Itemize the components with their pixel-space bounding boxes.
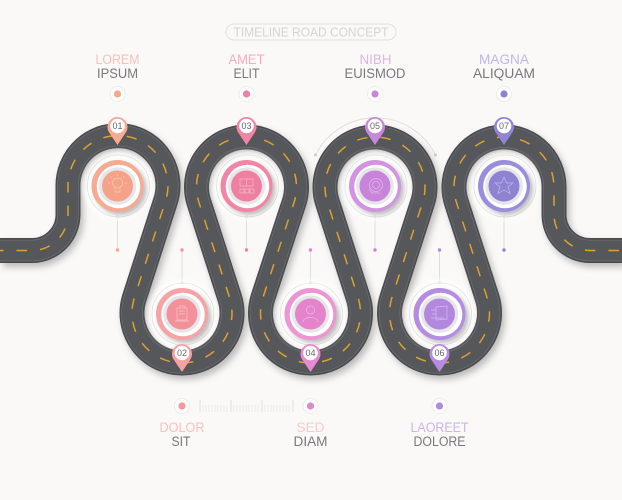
label 05	[344, 52, 406, 81]
dot 03	[239, 86, 254, 102]
dot 01	[110, 86, 125, 102]
badge 01	[82, 151, 152, 221]
label 07	[473, 52, 535, 81]
label 04	[294, 420, 328, 449]
connector 04	[309, 248, 312, 284]
label 01	[96, 52, 140, 81]
pin 02	[172, 344, 192, 372]
connector 02	[180, 248, 184, 284]
ruler	[200, 400, 293, 412]
connector 06	[438, 248, 441, 284]
winding road	[0, 136, 622, 367]
milestone 03	[212, 52, 282, 252]
pin 05	[365, 117, 385, 145]
label 04: SED	[296, 420, 325, 435]
ruler ticks	[203, 405, 289, 412]
icon: light bulb	[108, 174, 127, 192]
dot 04	[303, 398, 318, 414]
label 06: LAOREET	[410, 420, 468, 435]
badge 07	[469, 151, 539, 221]
label 07: ALIQUAM	[473, 66, 535, 81]
badge 05	[340, 151, 410, 221]
pin 01: 01	[112, 121, 123, 131]
dot 07	[496, 86, 512, 102]
pin 05: 05	[370, 121, 380, 131]
pin 03: 03	[241, 121, 252, 131]
milestone 01	[82, 52, 152, 252]
milestone 05	[340, 52, 410, 252]
label 02	[160, 420, 205, 449]
badge 04	[276, 279, 346, 349]
pin 06	[430, 344, 450, 372]
milestone 07	[469, 52, 539, 252]
label 03: AMET	[228, 52, 264, 67]
icon: brain	[369, 178, 382, 193]
badge 06	[404, 279, 474, 349]
label 04: DIAM	[294, 434, 328, 449]
pin 01	[108, 117, 128, 145]
connector 07	[502, 215, 506, 252]
pin 06: 06	[434, 348, 445, 358]
icon: book	[240, 179, 254, 193]
badge 03	[212, 151, 282, 221]
dot 02	[174, 398, 190, 414]
label 02: SIT	[172, 434, 190, 449]
pin 07	[494, 117, 514, 145]
pin 07: 07	[499, 121, 509, 131]
pin 02: 02	[177, 348, 187, 358]
pin 03	[237, 117, 256, 145]
milestone 06	[404, 248, 474, 449]
icon: clipboard	[175, 306, 189, 321]
dot 05	[368, 86, 382, 102]
label 01: LOREM	[96, 52, 140, 67]
pin 04	[300, 344, 320, 372]
label 03	[228, 52, 264, 81]
label 05: EUISMOD	[344, 66, 406, 81]
pin 04: 04	[305, 348, 316, 358]
icon: star	[495, 177, 513, 194]
label 02: DOLOR	[160, 420, 205, 435]
milestone 02	[147, 248, 217, 449]
label 03: ELIT	[234, 66, 260, 81]
icon: person	[303, 306, 318, 322]
dot 06	[432, 398, 447, 414]
badge 02	[147, 279, 217, 349]
connector 01	[116, 215, 119, 252]
label 01: IPSUM	[97, 66, 138, 81]
title: TIMELINE ROAD CONCEPT	[234, 26, 389, 40]
label 05: NIBH	[360, 52, 392, 67]
milestone 04	[276, 248, 346, 449]
connector 03	[245, 215, 248, 252]
icon: document	[431, 306, 447, 320]
label 06: DOLORE	[414, 434, 466, 449]
decorative arc around marker 05	[314, 118, 437, 156]
label 06	[410, 420, 468, 449]
label 07: MAGNA	[479, 52, 529, 67]
connector 05	[373, 215, 377, 252]
